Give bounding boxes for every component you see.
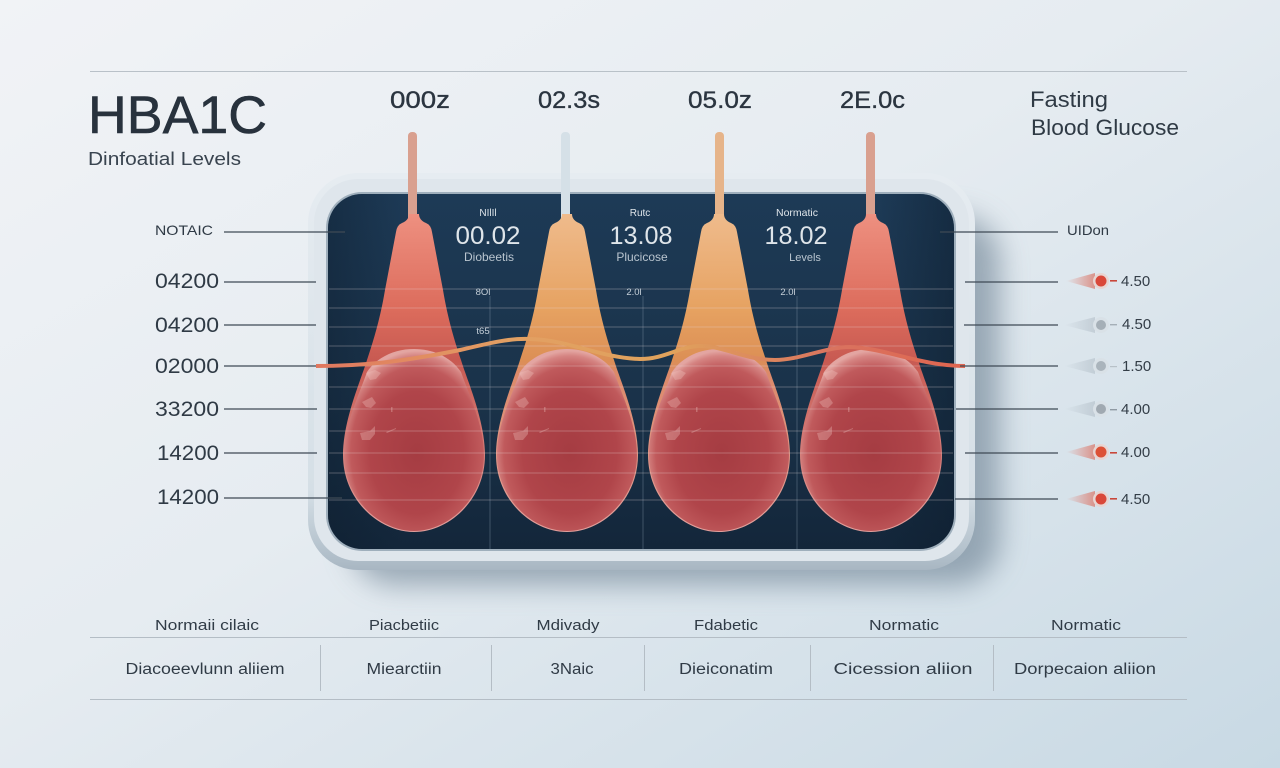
bottom table headers: Mdivady bbox=[536, 617, 600, 634]
bottom table headers: Normatic bbox=[869, 617, 940, 634]
marker 4.50 red lower bbox=[1066, 491, 1150, 508]
panel stat: nilil bbox=[456, 208, 520, 264]
bottom table headers bbox=[155, 617, 1122, 634]
marker 4.00 grey bbox=[1064, 401, 1150, 418]
droplet 3 bbox=[648, 132, 790, 532]
panel stat: rutc bbox=[610, 208, 672, 264]
left axis labels: 14200 bbox=[157, 442, 219, 465]
marker 1.50 grey: 1.50 bbox=[1122, 358, 1151, 375]
grid tick labels: 2.0l bbox=[626, 287, 642, 298]
bottom table values: Miearctiin bbox=[366, 661, 442, 678]
bottom table rules bbox=[90, 637, 1187, 700]
panel: chart frame bbox=[308, 173, 975, 570]
bottom table headers: Normaii cilaic bbox=[155, 617, 260, 634]
marker 4.00 red bbox=[1066, 444, 1150, 461]
top values: 000z bbox=[390, 87, 450, 114]
panel stat: rutc: Rutc bbox=[630, 208, 650, 219]
right axis heading: UIDon bbox=[1067, 222, 1109, 238]
left axis labels: 14200 bbox=[157, 486, 219, 509]
subtitle: Dinfoatial Levels bbox=[88, 149, 241, 169]
panel stat: normatic: Levels bbox=[789, 252, 821, 264]
bottom table values: Diacoeevlunn aliiem bbox=[126, 661, 284, 678]
left axis labels bbox=[155, 222, 219, 509]
heading: fasting blood glucose: Blood Glucose bbox=[1031, 115, 1179, 140]
marker 4.00 grey: 4.00 bbox=[1121, 401, 1150, 418]
marker 4.50 red lower: 4.50 bbox=[1121, 491, 1150, 508]
right leader lines bbox=[940, 232, 1058, 499]
top rule bbox=[90, 71, 1187, 72]
top values: 2E.0c bbox=[840, 87, 905, 114]
left leader lines bbox=[224, 232, 345, 498]
grid tick labels: 8Ol bbox=[476, 287, 490, 298]
left axis labels: 04200 bbox=[155, 314, 219, 337]
heading: fasting blood glucose: Fasting bbox=[1030, 87, 1108, 112]
bottom table values: Dorpecaion aliion bbox=[1014, 661, 1156, 678]
grid tick labels: 2.0l bbox=[780, 287, 796, 298]
droplet 4 bbox=[800, 132, 942, 532]
top values bbox=[390, 87, 905, 114]
left axis labels: NOTAIC bbox=[155, 222, 213, 238]
panel stat: normatic: 18.02 bbox=[764, 222, 828, 250]
bottom table headers: Normatic bbox=[1051, 617, 1122, 634]
dark chart area bbox=[328, 194, 954, 549]
panel stat: nilil: 00.02 bbox=[456, 222, 520, 250]
marker 4.50 grey: 4.50 bbox=[1122, 316, 1151, 333]
bottom table headers: Piacbetiic bbox=[369, 617, 440, 634]
panel stat: normatic: Normatic bbox=[776, 207, 818, 219]
trend curve bbox=[316, 339, 965, 366]
bottom table values: 3Naic bbox=[550, 661, 594, 678]
panel stat: rutc: 13.08 bbox=[610, 222, 672, 250]
bottom table values: Cicession aliion bbox=[834, 661, 972, 678]
left axis labels: 04200 bbox=[155, 270, 219, 293]
grid horizontal lines bbox=[329, 289, 953, 500]
marker 1.50 grey bbox=[1064, 358, 1151, 375]
droplet 2 bbox=[496, 132, 638, 532]
panel stat: normatic bbox=[764, 207, 828, 264]
marker 4.50 red bbox=[1066, 273, 1150, 290]
grid tick labels: t65 bbox=[476, 326, 490, 337]
panel stat: nilil: NIlIl bbox=[479, 208, 497, 219]
heading: fasting blood glucose bbox=[1030, 87, 1179, 140]
title: HBA1C bbox=[88, 86, 267, 145]
panel stat: rutc: Plucicose bbox=[616, 250, 668, 264]
top values: 05.0z bbox=[688, 87, 752, 114]
bottom table values bbox=[126, 661, 1156, 678]
bottom table values: Dieiconatim bbox=[679, 661, 773, 678]
left axis labels: 33200 bbox=[155, 398, 219, 421]
left axis labels: 02000 bbox=[155, 355, 219, 378]
grid vertical lines bbox=[490, 296, 797, 549]
bottom table headers: Fdabetic bbox=[694, 617, 759, 634]
marker 4.50 grey bbox=[1064, 316, 1151, 333]
top values: 02.3s bbox=[538, 87, 600, 114]
marker 4.50 red: 4.50 bbox=[1121, 273, 1150, 290]
panel stat: nilil: Diobeetis bbox=[464, 250, 514, 264]
marker 4.00 red: 4.00 bbox=[1121, 444, 1150, 461]
grid tick labels bbox=[476, 287, 796, 337]
panel shadow bbox=[350, 215, 1000, 585]
droplet 1 bbox=[343, 132, 485, 532]
